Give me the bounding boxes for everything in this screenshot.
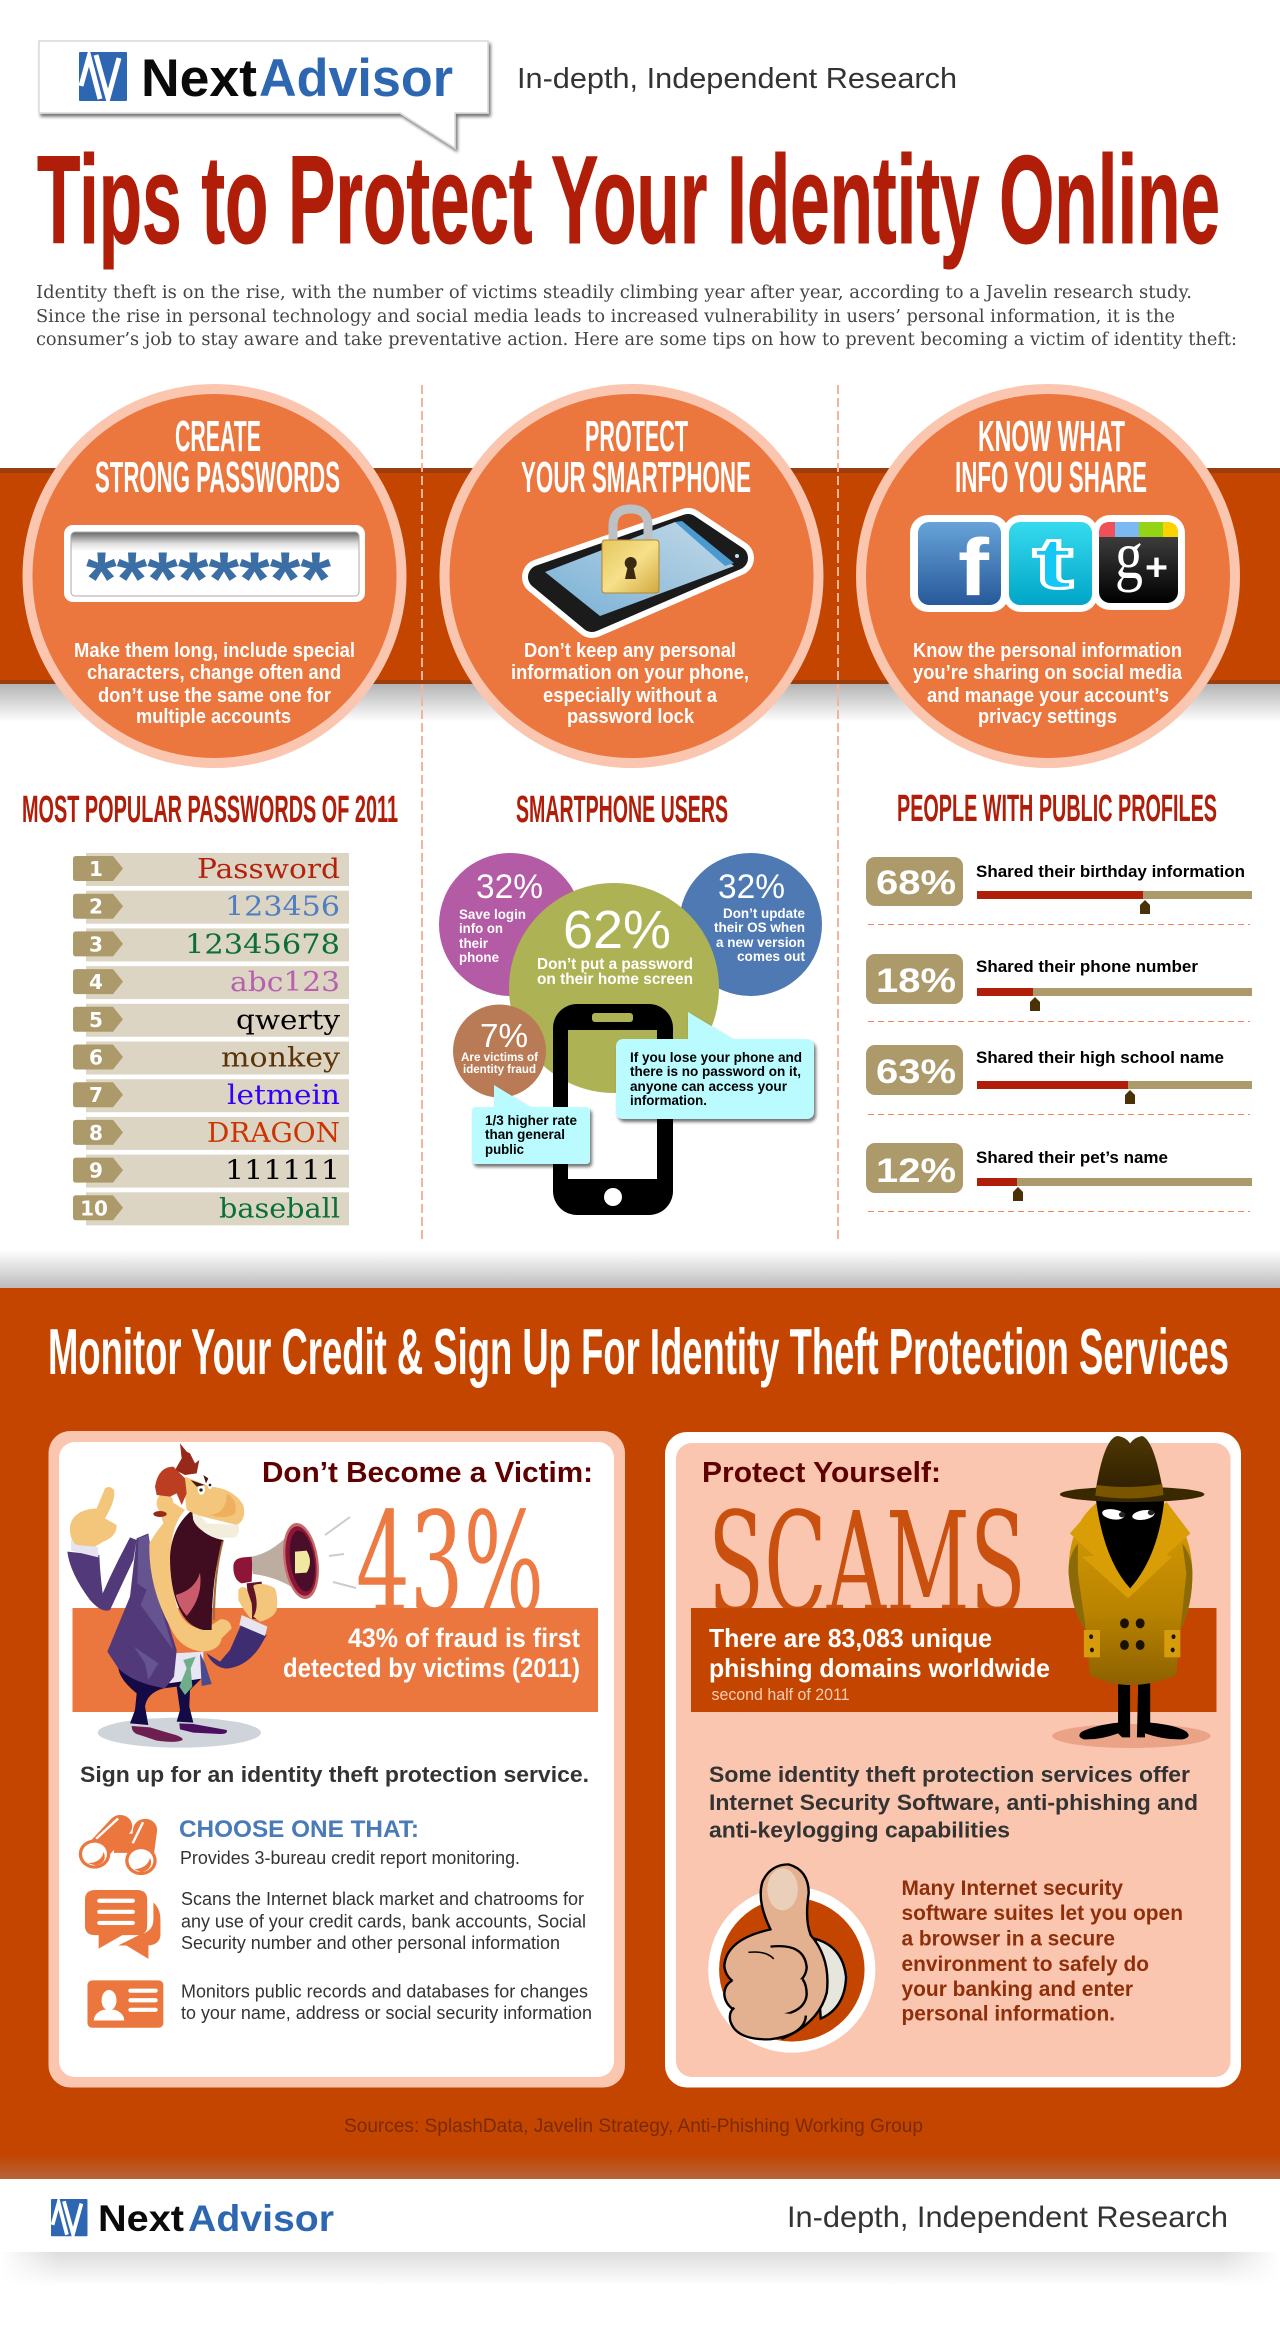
sources: Sources: SplashData, Javelin Strategy, Anti-Phishing Working Group [344, 2116, 923, 2137]
bubble: 7% identity fraud: Are victims of [461, 1050, 539, 1064]
callout: lose your phone: If you lose your phone and [630, 1049, 802, 1065]
icon: thumbs up [708, 1864, 875, 2053]
body text: characters, change often and [87, 662, 341, 684]
heading: STRONG PASSWORDS [95, 453, 340, 502]
callout: 1/3 higher rate: public [485, 1141, 524, 1157]
callout: 1/3 higher rate [472, 1085, 590, 1164]
heading [521, 412, 751, 502]
panel: password list: 9 [89, 1159, 103, 1183]
heading [95, 412, 340, 502]
icon: social networks: + [1145, 547, 1168, 589]
panel: password list: 12345678 [185, 929, 340, 960]
text: some identity theft services: Internet Security Software, anti-phishing and [709, 1790, 1198, 1815]
panel: password list: Password [197, 854, 340, 885]
text: many internet security suites: a browser in a secure [902, 1928, 1115, 1950]
body text [511, 640, 749, 728]
text: many internet security suites [902, 1877, 1183, 2026]
orange banner [72, 1608, 598, 1712]
panel: password list: 1 [89, 857, 103, 881]
body text: you’re sharing on social media [913, 662, 1183, 684]
heading: KNOW WHAT [978, 412, 1125, 461]
bubble: 32% don't update: a new version [716, 934, 805, 950]
footer wordmark: Advisor [188, 2198, 334, 2239]
bubble: 32% don't update: Don’t update [723, 905, 805, 921]
icon: phone [553, 1004, 673, 1215]
body text: information on your phone, [511, 662, 749, 684]
icon: social networks [910, 515, 1185, 613]
text: credit report monitoring: Provides 3-bureau credit report monitoring. [180, 1848, 520, 1868]
text: monitors public records [181, 1982, 592, 2023]
panel: password list: baseball [219, 1193, 340, 1224]
icon: footer logo mark [51, 2199, 87, 2236]
orange tips band [0, 468, 1280, 722]
icon: shouting man with megaphone [67, 1443, 323, 1748]
stat: phone number 18%: 18% [876, 962, 956, 1000]
panel: password list: 10 [80, 1196, 108, 1220]
body text: Don’t keep any personal [524, 640, 736, 662]
heading [955, 412, 1147, 502]
panel: password list: 4 [89, 970, 103, 994]
panel: don't become a victim [48, 1431, 625, 2088]
heading: CREATE [175, 412, 261, 461]
body text: privacy settings [978, 706, 1117, 728]
text: sign up: Sign up for an identity theft protection service. [80, 1762, 589, 1787]
orange banner: There are 83,083 unique [709, 1623, 992, 1653]
panel: password list: 5 [89, 1008, 103, 1032]
text: scans the internet [181, 1889, 586, 1953]
stat: pet's name 12%: Shared their pet’s name [976, 1148, 1168, 1167]
heading: smartphone users: SMARTPHONE USERS [516, 789, 728, 831]
icon: NextAdvisor logo mark [79, 52, 127, 101]
callout: lose your phone: information. [630, 1092, 707, 1108]
stat: high school 63% [866, 1045, 1252, 1104]
text: many internet security suites: software suites let you open [902, 1902, 1183, 1925]
callout: 1/3 higher rate: 1/3 higher rate [485, 1112, 577, 1128]
heading: Don’t Become a Victim: [262, 1457, 593, 1489]
panel: password list: 111111 [225, 1156, 340, 1187]
icon: smartphone with padlock [540, 509, 739, 620]
orange banner: phishing domains worldwide [709, 1653, 1050, 1683]
bubble: 32% save login [439, 853, 582, 996]
bubble: 7% identity fraud: 7% [480, 1017, 528, 1054]
stat: high school 63%: 63% [876, 1053, 956, 1091]
body text: don’t use the same one for [98, 685, 331, 707]
body text: password lock [567, 706, 695, 728]
bubble: 62% no password: on their home screen [537, 971, 693, 988]
bubble: 32% don't update: comes out [737, 948, 805, 964]
bubble: 7% identity fraud [453, 1004, 546, 1098]
intro text: consumer’s job to stay aware and take preventative action. Here are some tips on how to prevent becoming a victim of identity theft: [36, 330, 1237, 350]
text: scans the internet: Security number and other personal information [181, 1933, 560, 1953]
panel: monitor your credit section [0, 1288, 1280, 2179]
panel: password list [73, 853, 349, 1225]
panel: smartphone users chart [439, 853, 822, 1215]
heading: YOUR SMARTPHONE [521, 453, 751, 502]
panel: password list: 123456 [225, 892, 340, 923]
bubble: 32% don't update [679, 853, 822, 996]
callout: lose your phone [616, 1012, 814, 1119]
orange banner: second half of 2011 [712, 1685, 850, 1704]
panel: password list: 6 [89, 1046, 103, 1070]
text: some identity theft services: Some identity theft protection services offer [709, 1762, 1190, 1787]
panel: password list: monkey [221, 1042, 341, 1074]
text: many internet security suites: environment to safely do [902, 1953, 1149, 1976]
footer tagline: In-depth, Independent Research [787, 2201, 1228, 2234]
bubble: 32% save login: their [459, 935, 489, 951]
body text [74, 640, 355, 728]
panel: password list: 3 [89, 932, 103, 956]
bubble: 32% don't update: their OS when [714, 919, 805, 935]
panel: protect yourself [665, 1432, 1241, 2088]
stat: birthday 68% [866, 857, 1252, 914]
password field [64, 525, 365, 622]
text: scans the internet: any use of your credit cards, bank accounts, Social [181, 1912, 586, 1932]
heading: choose one that: CHOOSE ONE THAT: [179, 1816, 419, 1843]
heading: most popular passwords: MOST POPULAR PASSWORDS OF 2011 [22, 789, 398, 831]
logo wordmark: Advisor [259, 49, 453, 108]
body text: and manage your account’s [927, 685, 1169, 707]
text: scans the internet: Scans the Internet black market and chatrooms for [181, 1889, 584, 1909]
panel: password list: qwerty [236, 1005, 341, 1036]
callout: 1/3 higher rate: than general [485, 1126, 565, 1142]
callout: lose your phone: there is no password on it, [630, 1063, 801, 1079]
footer wordmark: Next [98, 2198, 184, 2239]
bubble: 32% don't update: 32% [718, 868, 785, 906]
icon: binoculars [79, 1818, 157, 1875]
bubble: 62% no password: 62% [563, 900, 671, 960]
body text: multiple accounts [136, 706, 291, 728]
bubble: 32% save login: 32% [476, 868, 543, 906]
panel: password list: 7 [89, 1083, 103, 1107]
text: some identity theft services [709, 1762, 1198, 1842]
bubble: 7% identity fraud: identity fraud [463, 1062, 536, 1076]
text: many internet security suites: Many Internet security [902, 1877, 1123, 1900]
body text: Make them long, include special [74, 640, 355, 662]
panel: create strong passwords [22, 384, 406, 768]
panel: password list: 8 [89, 1121, 103, 1145]
bubble: 32% save login: info on [459, 920, 503, 936]
stat: phone number 18% [866, 954, 1252, 1011]
callout: lose your phone: anyone can access your [630, 1078, 788, 1094]
panel: password list: letmein [227, 1080, 340, 1111]
logo wordmark: Next [141, 49, 257, 108]
heading: PROTECT [585, 412, 688, 461]
orange banner: detected by victims (2011) [283, 1653, 580, 1683]
heading: Protect Yourself: [702, 1457, 941, 1489]
panel: password list: DRAGON [207, 1118, 340, 1149]
body text: especially without a [543, 685, 718, 707]
panel: know what info you share [856, 384, 1240, 768]
stat: high school 63%: Shared their high school name [976, 1048, 1224, 1067]
intro text: Since the rise in personal technology and social media leads to increased vulnerability in users’ personal information, it is the [36, 307, 1175, 327]
body text [913, 640, 1183, 728]
intro text: Identity theft is on the rise, with the number of victims steadily climbing year after year, according to a Javelin research study. [36, 283, 1192, 303]
stat: birthday 68%: Shared their birthday information [976, 862, 1245, 881]
text: some identity theft services: anti-keylogging capabilities [709, 1818, 1010, 1842]
stat: pet's name 12%: 12% [876, 1152, 956, 1190]
intro text [36, 283, 1237, 350]
text: many internet security suites: your banking and enter [902, 1978, 1133, 2001]
text: monitors public records: to your name, address or social security information [181, 2003, 592, 2023]
header logo callout [39, 41, 488, 148]
password field: ******** [86, 537, 331, 622]
bubble: 32% save login: Save login [459, 906, 526, 922]
stat: birthday 68%: 68% [876, 864, 956, 902]
panel: password list: 2 [89, 895, 103, 919]
tagline: In-depth, Independent Research [517, 63, 957, 95]
icon: social networks: g [1115, 517, 1143, 593]
big number 43%: 43% [356, 1483, 544, 1646]
text: monitors public records: Monitors public records and databases for changes [181, 1982, 588, 2002]
text: many internet security suites: personal information. [902, 2002, 1115, 2026]
icon: chat bubbles [85, 1890, 160, 1959]
icon: social networks: t [1033, 524, 1073, 604]
footer [0, 2179, 1280, 2252]
bubble: 62% no password [509, 883, 719, 1093]
icon: spy in trench coat [1052, 1436, 1210, 1748]
stat: phone number 18%: Shared their phone number [976, 957, 1198, 976]
orange banner [691, 1608, 1216, 1712]
orange banner: 43% of fraud is first [348, 1623, 580, 1653]
panel: protect your smartphone [440, 384, 824, 768]
icon: id card [87, 1980, 163, 2028]
body text: Know the personal information [913, 640, 1182, 662]
big word SCAMS: SCAMS [708, 1483, 1026, 1646]
stat: pet's name 12% [866, 1143, 1252, 1201]
bubble: 62% no password: Don’t put a password [537, 956, 693, 973]
bubble: 32% save login: phone [459, 949, 499, 965]
panel: public profile stats [866, 857, 1252, 1212]
icon: social networks: f [958, 523, 990, 613]
panel: password list: abc123 [230, 967, 340, 998]
